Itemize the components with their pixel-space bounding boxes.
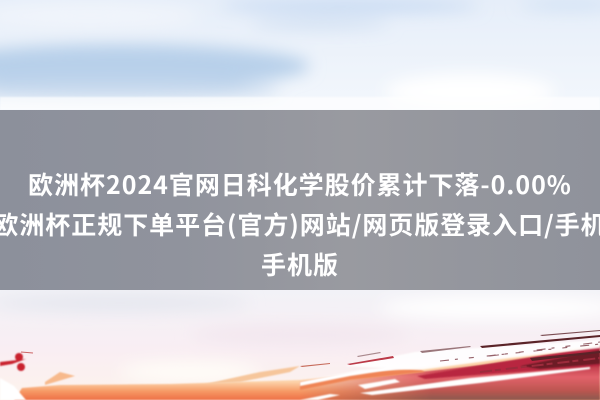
grey title band: [0, 110, 600, 290]
white brush gaps: [0, 340, 600, 400]
title text: 手机版: [261, 246, 339, 282]
right red area: [300, 352, 600, 400]
red and dark band: [417, 346, 600, 379]
title text: 欧洲杯正规下单平台(官方)网站/网页版登录入口/手机: [0, 206, 600, 242]
orange band: [300, 369, 425, 390]
red splash: [0, 353, 26, 371]
title text: [0, 166, 600, 282]
title text: 欧洲杯2024官网日科化学股价累计下落-0.00%: [28, 166, 572, 202]
speckled dashes: [440, 342, 600, 361]
dark brush flecks: [300, 330, 600, 367]
left orange horizon: [14, 345, 600, 400]
